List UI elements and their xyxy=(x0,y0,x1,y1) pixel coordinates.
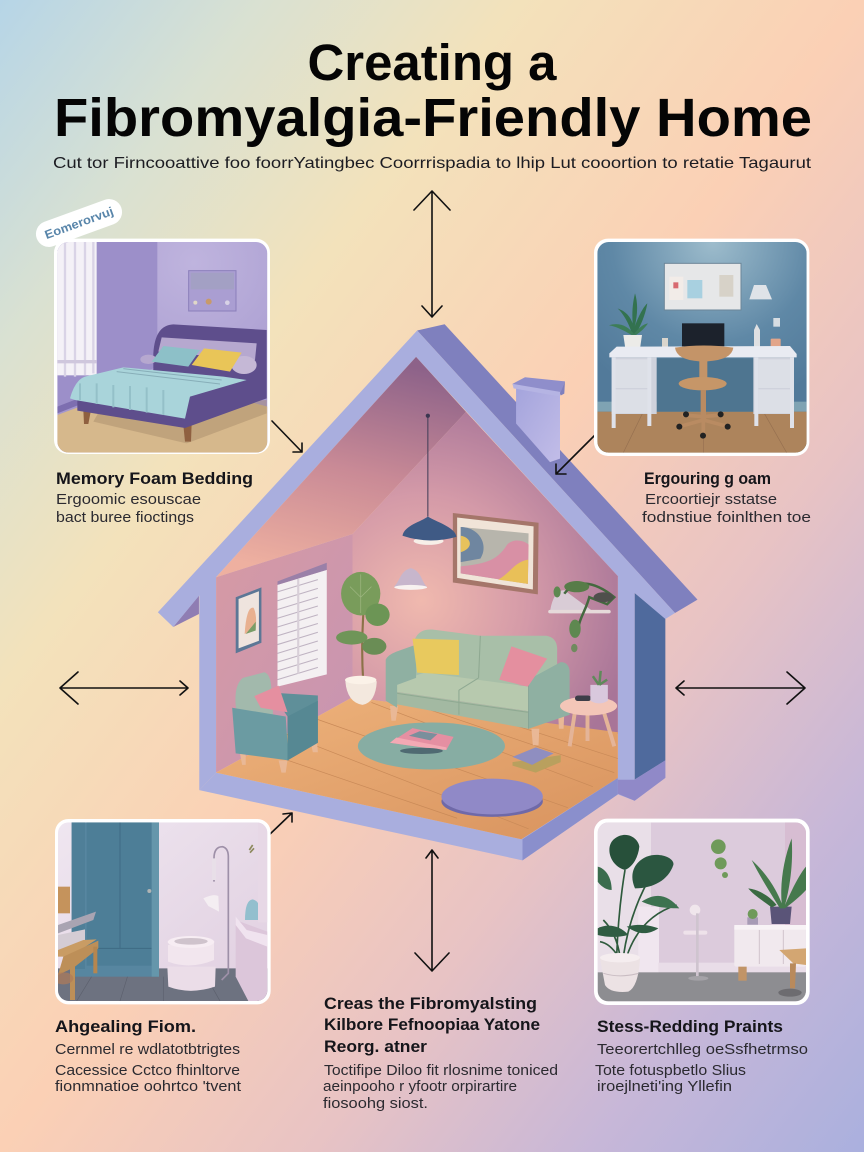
hanging plant xyxy=(548,581,614,652)
arrow: top vertical xyxy=(414,191,450,317)
text: centre callout: Kilbore Fefnoopiaa Yatone xyxy=(324,1015,540,1034)
text: centre callout: fiosoohg siost. xyxy=(323,1095,428,1112)
arrow: right horizontal xyxy=(676,672,805,704)
text: ahgealing fiom: Cacessice Cctco fhinltorve xyxy=(55,1062,240,1079)
text: memory foam bedding: Memory Foam Bedding xyxy=(56,469,253,488)
panel: bedroom photo xyxy=(54,239,270,454)
text: ahgealing fiom xyxy=(55,1017,242,1095)
text: centre callout: aeinpooho r yfootr orpirartire xyxy=(323,1078,517,1095)
framed picture: left wall xyxy=(236,587,261,653)
text: centre callout: Toctifipe Diloo fit rlosnime toniced xyxy=(324,1062,558,1079)
framed art: back wall xyxy=(453,513,539,594)
text: centre callout xyxy=(323,994,558,1112)
floor cushion xyxy=(441,779,543,817)
text: centre callout: Creas the Fibromyalsting xyxy=(324,994,537,1013)
house: back wall xyxy=(352,412,618,734)
text: centre callout: Reorg. atner xyxy=(324,1037,427,1056)
text: ergonomic desk: fodnstiue foinlthen toe xyxy=(642,509,811,526)
wall lamp xyxy=(394,568,427,590)
panel: bathroom photo xyxy=(53,819,271,1004)
text: ergonomic desk: Ercoortiejr sstatse xyxy=(645,491,777,508)
illustration: cutaway house xyxy=(158,324,697,860)
subtitle: Cut tor Firncooattive foo foorrYatingbec Coorrrispadia to lhip Lut cooortion to retatie Tagaurut xyxy=(53,155,812,172)
text: memory foam bedding: bact buree fioctings xyxy=(56,509,194,526)
text: memory foam bedding: Ergoomic esouscae xyxy=(56,491,201,508)
text: stress-reducing paints: Tote fotuspbetlo Slius xyxy=(595,1062,746,1079)
text: stress-reducing paints: iroejlneti'ing Yllefin xyxy=(597,1078,732,1095)
armchair xyxy=(232,672,318,773)
floor books xyxy=(512,747,561,773)
house: ceiling xyxy=(216,357,466,577)
text: ahgealing fiom: fionmnatioe oohrtco 'tvent xyxy=(55,1078,242,1095)
text: stress-reducing paints xyxy=(595,1017,808,1095)
text: ergonomic desk xyxy=(642,469,811,526)
panel: office photo xyxy=(594,239,809,456)
text: stress-reducing paints: Stess-Redding Praints xyxy=(597,1017,783,1036)
badge: bedroom tag xyxy=(32,195,126,251)
text: ergonomic desk: Ergouring g oam xyxy=(644,469,771,488)
rug xyxy=(358,722,505,769)
text: memory foam bedding xyxy=(56,469,253,526)
arrow: bedroom to house xyxy=(272,421,302,452)
pendant lamp xyxy=(402,414,456,545)
panel: plants room photo xyxy=(594,819,810,1005)
title: Creating a xyxy=(308,34,557,91)
arrow: bathroom to house xyxy=(268,813,292,836)
window with blinds xyxy=(277,563,327,687)
floor plant xyxy=(336,572,390,705)
sofa xyxy=(386,629,570,745)
text: ahgealing fiom: Cernmel re wdlatotbtrigtes xyxy=(55,1041,240,1058)
title xyxy=(54,34,812,148)
coffee table book xyxy=(390,728,454,754)
house: bottom slab and right side xyxy=(173,593,665,860)
house: wood floor xyxy=(216,697,618,839)
badge: bedroom tag: Eomerorvuj xyxy=(43,204,115,242)
arrow: office to house xyxy=(556,435,595,474)
house: chimney xyxy=(512,377,565,462)
house: left wall xyxy=(216,534,352,773)
title: Fibromyalgia-Friendly Home xyxy=(54,88,812,148)
arrow: bottom vertical xyxy=(415,850,449,971)
text: ahgealing fiom: Ahgealing Fiom. xyxy=(55,1017,196,1036)
arrow: left horizontal xyxy=(60,672,188,704)
house: roof and front frame xyxy=(158,324,697,790)
side table xyxy=(560,671,617,746)
text: stress-reducing paints: Teeorertchlleg oeSsfhetrmso xyxy=(597,1041,808,1058)
